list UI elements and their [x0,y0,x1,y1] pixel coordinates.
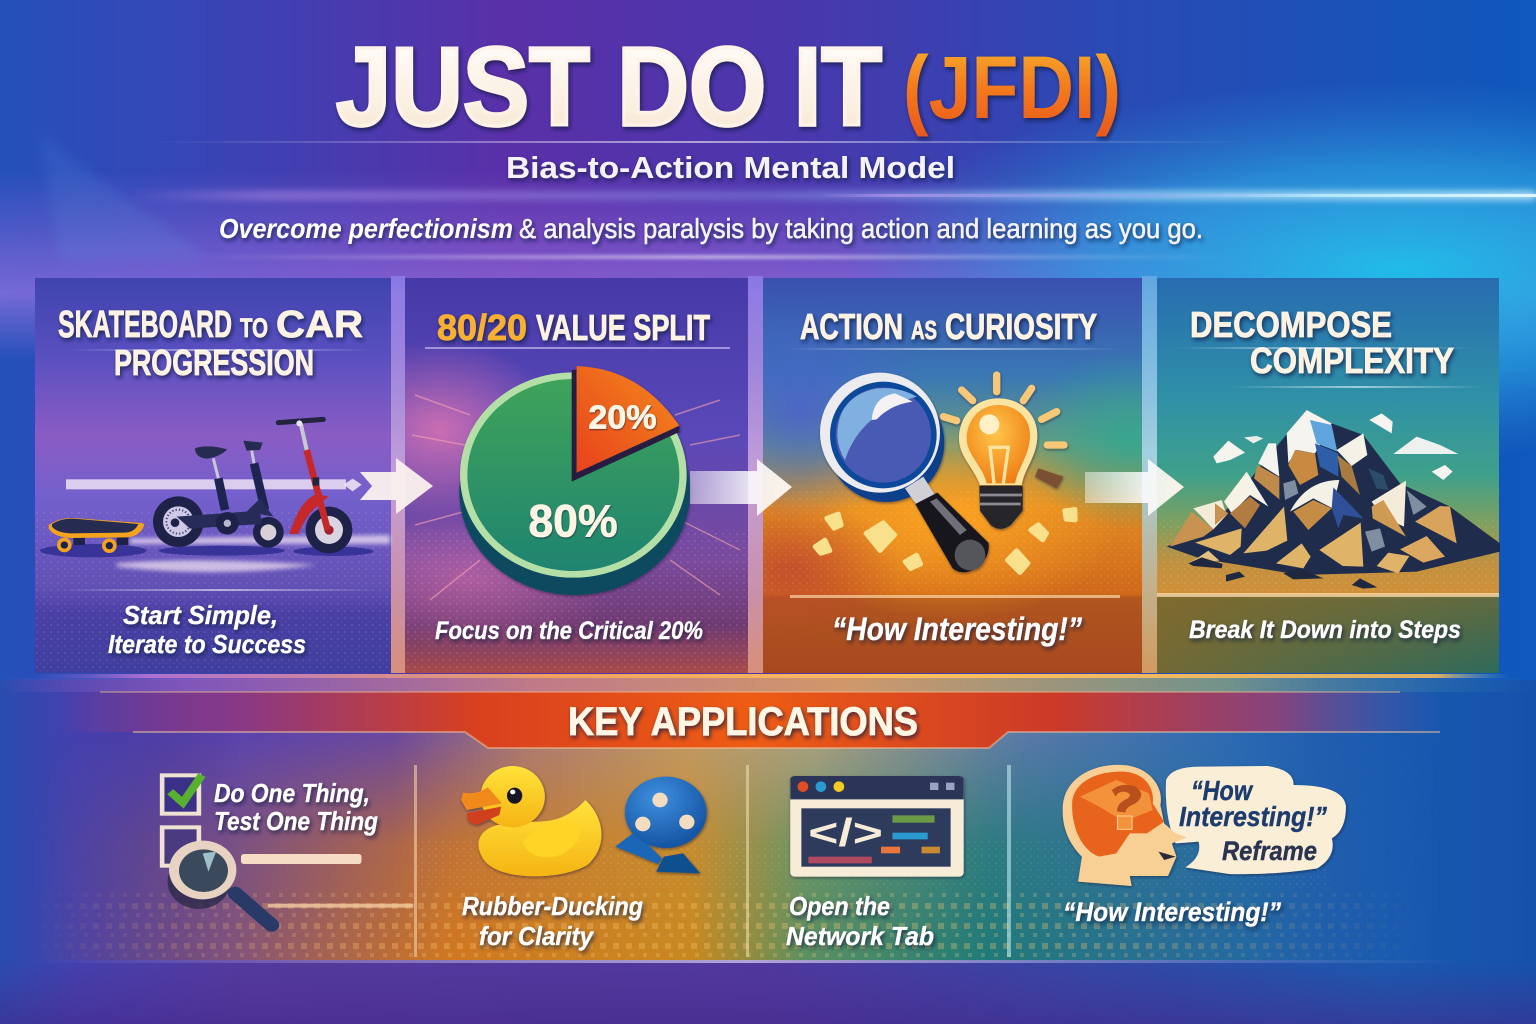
arrow: panel 2 to 3 [690,459,792,516]
heading: decompose complexity: COMPLEXITY [1250,340,1454,381]
heading: skateboard to car: SKATEBOARD [58,304,232,346]
heading: action as curiosity: ACTION [800,306,903,347]
caption [108,600,306,659]
icon: checklist and magnifier [162,775,413,925]
arrow: panel 3 to 4 [1085,459,1184,516]
caption: Break It Down into Steps [1189,616,1461,644]
icon: light bulb [943,375,1064,529]
panel: 80/20 value split [405,278,748,673]
icon: gold fragments [815,509,1075,573]
heading: decompose complexity [1190,304,1454,381]
icon: mountain of rocks [1167,410,1500,589]
caption: Start Simple, [123,600,278,630]
slice: 20% [577,366,679,473]
progression illustration [40,419,390,572]
label [786,891,934,951]
heading: skateboard to car [58,304,363,383]
label [462,891,643,951]
heading: 80/20 value split: 80/20 [437,307,527,348]
caption: Focus on the Critical 20% [435,617,703,645]
subtitle: Bias-to-Action Mental Model [506,150,955,185]
label [214,778,378,836]
heading: skateboard to car: TO [240,313,268,343]
label: for Clarity [479,921,594,951]
panel: action as curiosity [763,278,1142,673]
caption: “How Interesting!” [832,611,1082,647]
icon: scooter [278,419,352,553]
application: how interesting reframe [1063,765,1346,927]
tagline: Overcome perfectionism [219,213,513,244]
pie chart [459,366,690,595]
banner: key applications [60,691,1440,748]
panel: key applications [30,691,1460,963]
heading: 80/20 value split: VALUE SPLIT [536,307,710,348]
panel: skateboard to car [35,278,391,673]
application: do one thing [162,775,413,925]
icon: balance bike [153,441,284,548]
arrow: panel 1 to 2 [360,458,433,514]
label: Do One Thing, [214,778,370,808]
heading: action as curiosity [800,306,1097,347]
icon: browser window [790,776,964,877]
icon: magnifying glass [820,373,989,572]
tagline [219,213,1203,244]
label: 80%: 80% [528,496,618,547]
label: Rubber-Ducking [462,891,643,921]
heading: decompose complexity: DECOMPOSE [1190,304,1392,345]
heading: KEY APPLICATIONS [568,700,918,744]
heading: action as curiosity: AS [911,315,937,345]
title: (JFDI) [903,37,1121,137]
icon: browser window: </> [808,811,883,854]
bubble text: Reframe [1222,836,1317,866]
label: Test One Thing [214,806,378,836]
panel gaps [0,276,1536,692]
label: Network Tab [786,921,934,951]
bubble text [1179,775,1327,866]
icon: head with reframe speech bubble [1063,765,1346,886]
heading: skateboard to car: CAR [276,304,363,346]
title: JUST DO IT [336,25,882,149]
heading: action as curiosity: CURIOSITY [945,306,1097,347]
bubble text: “How [1191,775,1254,806]
caption: Iterate to Success [108,629,306,659]
icon: rubber duck and blue figure [461,766,707,876]
tagline: & analysis paralysis by taking action and learning as you go. [519,213,1203,244]
bubble text: Interesting!” [1179,801,1327,832]
application: rubber ducking [461,766,707,951]
heading: skateboard to car: PROGRESSION [114,342,314,383]
label: 20%: 20% [588,399,657,436]
panel: decompose complexity [1157,278,1500,673]
heading: 80/20 value split [437,307,710,348]
icon: skateboard [49,518,144,553]
label: Open the [789,891,890,921]
application: network tab [786,776,964,951]
label: “How Interesting!” [1063,897,1281,927]
